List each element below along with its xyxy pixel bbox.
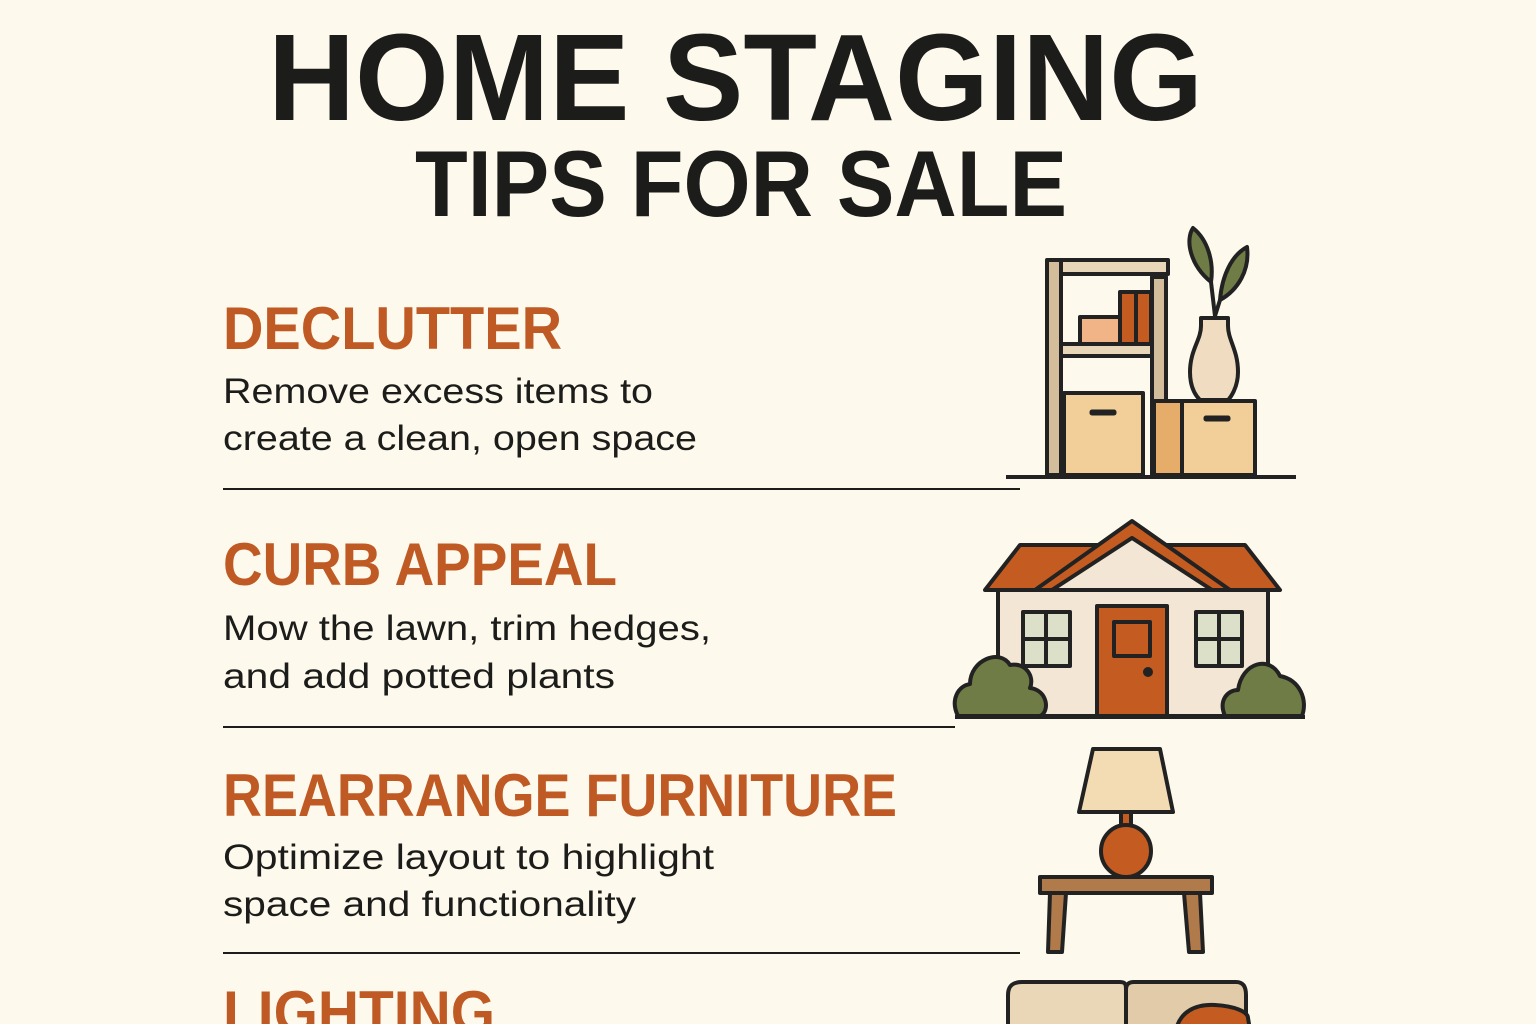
title: TIPS FOR SALE bbox=[415, 131, 1067, 236]
section: rearrange furniture: REARRANGE FURNITURE bbox=[223, 762, 897, 829]
section: curb appeal: Mow the lawn, trim hedges, bbox=[223, 609, 711, 648]
section: curb appeal: and add potted plants bbox=[223, 657, 615, 696]
section: declutter: create a clean, open space bbox=[223, 419, 697, 458]
section: rearrange furniture bbox=[223, 762, 1020, 953]
icon: house bbox=[955, 521, 1305, 717]
section: curb appeal: CURB APPEAL bbox=[223, 531, 617, 598]
icon: lamp on table bbox=[1040, 749, 1212, 952]
icon: sofa (cut off) bbox=[1008, 982, 1250, 1024]
section: rearrange furniture: space and functionality bbox=[223, 885, 637, 924]
section: rearrange furniture: Optimize layout to highlight bbox=[223, 838, 714, 877]
section: declutter bbox=[223, 295, 1020, 489]
section: declutter: Remove excess items to bbox=[223, 372, 653, 411]
icon: shelf with boxes and vase bbox=[1006, 228, 1296, 477]
section: curb appeal bbox=[223, 531, 955, 727]
title bbox=[268, 10, 1203, 236]
title: HOME STAGING bbox=[268, 10, 1203, 147]
section: declutter: DECLUTTER bbox=[223, 295, 562, 362]
